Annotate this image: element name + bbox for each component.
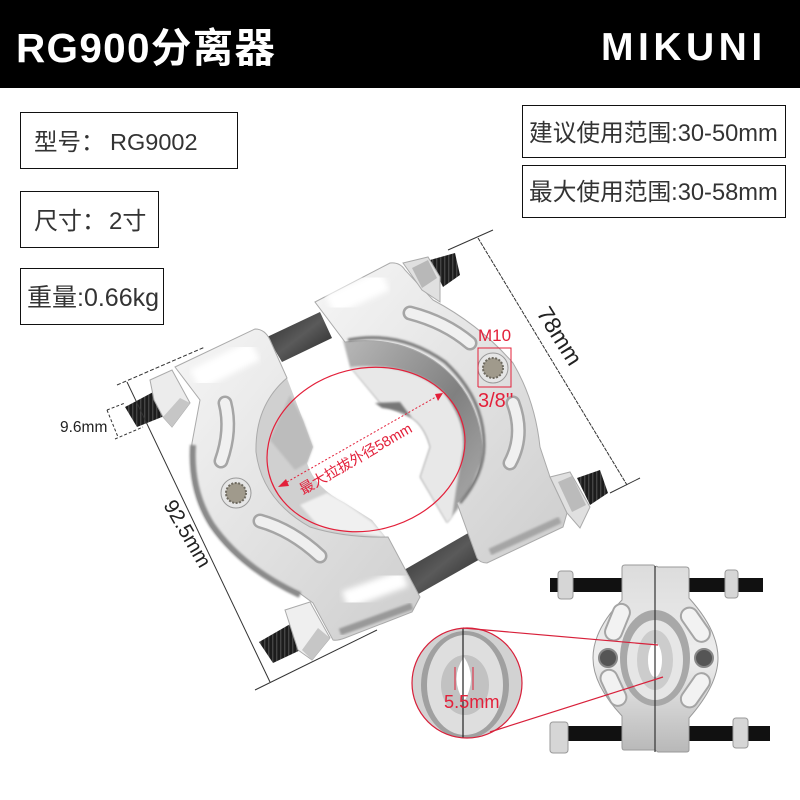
spec box: model: RG9002 [110,129,198,155]
right jaw dark band and plate [343,338,483,523]
right jaw [315,263,567,563]
spec box: recommended range: 建议使用范围:30-50mm [529,120,778,147]
small tool split line [654,566,656,752]
right jaw body [315,263,567,563]
dimension: 9.6mm [60,403,143,439]
spec box: size: 尺寸： [34,208,106,235]
red label: M10 and 3/8 thread [478,326,513,412]
left jaw outer shadow [193,445,300,595]
red label: M10 and 3/8 thread: M10 [478,326,511,345]
main separator tool photo [125,253,608,663]
left jaw back plate [250,373,388,540]
spec box: size [20,192,158,248]
left jaw threaded hole [221,478,251,508]
magnified detail circle [410,625,663,740]
dimension: 92.5mm [117,347,377,690]
small tool centre ring [620,610,690,706]
spec box: size: 2寸 [109,208,146,235]
dimension: 9.6mm: 9.6mm [60,419,107,436]
5.5mm gap label [444,667,500,712]
red ellipse: max pull diameter [249,347,483,552]
dimension: 92.5mm: 92.5mm [159,496,216,572]
red ellipse: max pull diameter: 最大拉拔外径58mm [296,420,415,498]
small tool slots [598,601,713,711]
brand name: MIKUNI [601,26,767,69]
small tool holes [599,649,617,667]
bolt: lower right [550,470,608,528]
left jaw [175,329,420,640]
bolt: upper right [403,253,460,302]
dimension: 78mm [448,230,640,493]
dimension: 78mm: 78mm [532,302,588,370]
5.5mm gap label: 5.5mm [444,692,500,712]
left jaw body [175,329,420,640]
bolt: upper left [125,370,190,427]
spec box: recommended range [522,106,786,158]
bolt: lower left [259,602,330,663]
spec box: model: 型号： [34,129,104,155]
rods [267,312,482,596]
callout lines to detail [463,628,663,732]
red label: M10 and 3/8 thread: 3/8'' [478,390,513,412]
small tool rods and nuts [550,570,770,753]
spec box: maximum range [522,166,786,218]
small front view of tool [550,565,770,753]
title: RG900分离器 [16,25,276,71]
right jaw threaded hole [478,353,508,383]
spec box: weight [20,268,164,324]
small tool body [593,565,718,752]
small tool centre opening [648,643,662,677]
spec box: weight: 重量:0.66kg [27,284,159,312]
spec box: model [20,112,238,168]
header bar [0,0,800,88]
left jaw slots [221,403,228,461]
spec box: maximum range: 最大使用范围:30-58mm [529,179,778,206]
right jaw slots [410,313,470,343]
